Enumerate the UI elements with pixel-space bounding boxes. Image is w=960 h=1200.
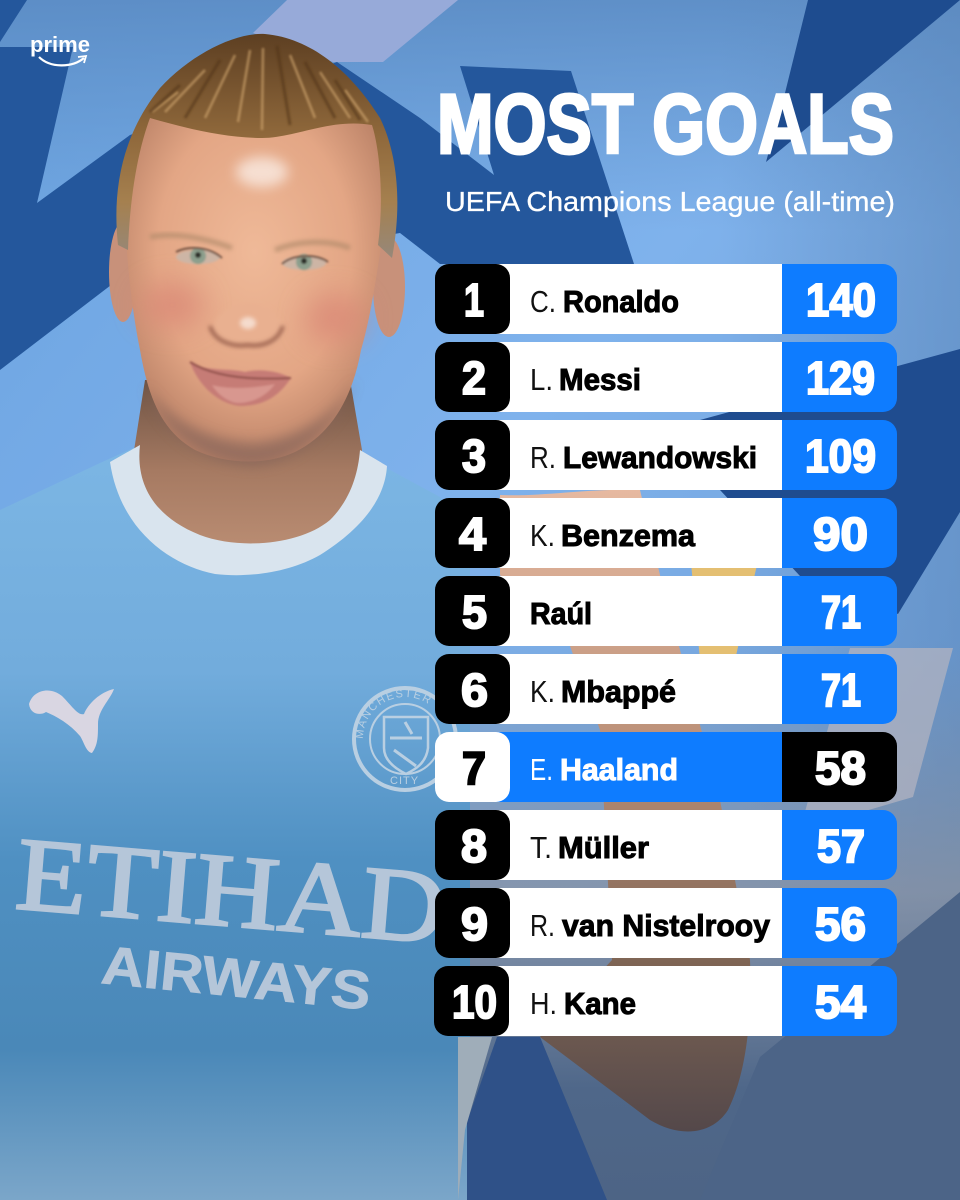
row 1: C. (530, 284, 556, 319)
row 8: 8 (461, 820, 487, 872)
row 7 highlighted: E. (530, 752, 553, 787)
row 2 (435, 342, 897, 412)
row 6 (435, 654, 897, 724)
row 10: Kane (564, 986, 636, 1021)
row 4: 4 (459, 508, 486, 560)
row 2: L. (530, 362, 553, 397)
row 10: 54 (815, 976, 866, 1028)
cheeks (140, 283, 365, 342)
row 6: 6 (461, 664, 488, 716)
eyebrows (150, 235, 350, 250)
eyes (176, 248, 328, 270)
row 5: Raúl (530, 596, 592, 631)
mouth (190, 362, 291, 406)
jaw stubble (146, 378, 356, 466)
row 8: T. (530, 830, 552, 865)
row 1: Ronaldo (563, 284, 679, 319)
row 9: van Nistelrooy (562, 908, 771, 943)
row 1: 1 (464, 274, 484, 326)
shirt (0, 445, 470, 1200)
row 3: Lewandowski (563, 440, 757, 475)
puma logo (29, 689, 114, 753)
row 5: 5 (462, 586, 487, 638)
sleeve stripe (458, 1037, 492, 1200)
row 9 (435, 888, 897, 958)
forehead highlight (236, 157, 288, 187)
row 6: 71 (821, 664, 861, 716)
hair (116, 34, 397, 258)
row 3: 3 (462, 430, 486, 482)
row 9: 9 (461, 898, 488, 950)
row 9: R. (530, 908, 555, 943)
row 6: Mbappé (561, 674, 676, 709)
city crest: CITY (390, 775, 419, 787)
arm behind the table (500, 490, 760, 1131)
nose (210, 303, 284, 346)
row 7 highlighted: Haaland (560, 752, 678, 787)
row 3 (435, 420, 897, 490)
row 7 highlighted: 7 (462, 742, 486, 794)
row 3: R. (530, 440, 556, 475)
row 1: 140 (806, 274, 876, 326)
row 7 highlighted (435, 732, 897, 802)
row 8: Müller (558, 830, 649, 865)
row 2: 2 (462, 352, 486, 404)
row 4: Benzema (561, 518, 696, 553)
row 5: 71 (821, 586, 861, 638)
city crest: MANCHESTER (356, 690, 431, 738)
row 2: Messi (559, 362, 641, 397)
sponsor wordmark (12, 816, 450, 1022)
ears (109, 222, 405, 337)
row 10 (434, 966, 897, 1036)
collar (110, 445, 387, 575)
row 3: 109 (805, 430, 876, 482)
row 10: H. (530, 986, 557, 1021)
subtitle: UEFA Champions League (all-time) (445, 186, 895, 217)
player photo illustration (0, 34, 756, 1200)
row 7 highlighted: 58 (815, 742, 866, 794)
row 1 (435, 264, 897, 334)
row 2: 129 (806, 352, 875, 404)
city crest (352, 686, 458, 792)
neck (133, 380, 362, 546)
prime logo: prime (30, 32, 90, 57)
row 10: 10 (452, 976, 497, 1028)
sponsor wordmark: AIRWAYS (99, 935, 373, 1022)
sponsor wordmark: ETIHAD (12, 816, 450, 967)
row 8 (435, 810, 897, 880)
row 5 (435, 576, 897, 646)
row 9: 56 (815, 898, 866, 950)
face (124, 100, 385, 462)
row 8: 57 (817, 820, 865, 872)
row 4 (435, 498, 897, 568)
row 4: K. (530, 518, 555, 553)
leaderboard table (434, 264, 897, 1036)
row 4: 90 (813, 508, 868, 560)
row 6: K. (530, 674, 555, 709)
